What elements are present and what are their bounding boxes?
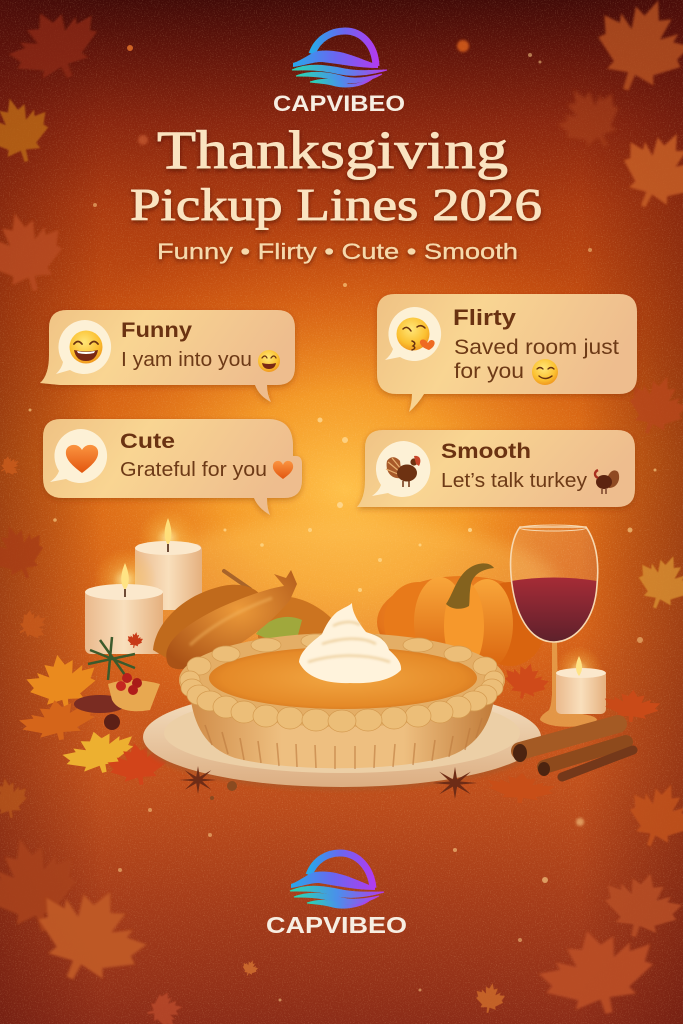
star anise and spices (179, 766, 477, 800)
bubble: cute: Cute (120, 430, 175, 453)
bubble: cute (43, 419, 302, 515)
whipped cream (299, 603, 401, 683)
bubble: flirty: Saved room just (454, 336, 619, 359)
bubble: smooth: Let’s talk turkey (441, 470, 587, 492)
icon: small smile (532, 359, 558, 385)
wine glass (511, 525, 598, 727)
bubble: smooth (357, 430, 635, 507)
icon: laughing face (56, 320, 111, 374)
leaves and branch, left of pie (17, 631, 171, 790)
bubble: funny: Funny (121, 319, 192, 342)
bubble: cute: Grateful for you (120, 459, 267, 481)
cinnamon sticks (513, 724, 633, 777)
title: Thanksgiving (157, 120, 508, 180)
top logo (292, 31, 387, 87)
foreground leaf (486, 770, 556, 806)
bubble: flirty (377, 294, 637, 412)
table setting glow (120, 520, 560, 660)
bubble: flirty: Flirty (453, 305, 517, 330)
icon: turkey (372, 441, 430, 497)
bottom logo (290, 853, 384, 908)
icon: small turkey (595, 470, 619, 494)
bubble: smooth: Smooth (441, 440, 531, 463)
pumpkin pie (179, 633, 505, 769)
pumpkin (377, 563, 547, 671)
icon: heart (50, 429, 107, 483)
crust rim (180, 634, 504, 732)
plate (143, 687, 541, 790)
candle: front (85, 548, 163, 654)
icon: small smile (258, 350, 280, 372)
subtitle: Funny • Flirty • Cute • Smooth (157, 239, 518, 264)
bubble: flirty: for you (454, 360, 524, 383)
candle: small (555, 646, 606, 714)
icon: kissing face (385, 307, 441, 361)
leaves right of plate (603, 688, 661, 724)
candle: back (135, 508, 202, 610)
top logo wordmark: CAPVIBEO (273, 91, 405, 116)
title (130, 120, 542, 230)
bubble: funny: I yam into you (121, 349, 252, 371)
roast turkey (153, 570, 335, 669)
title: Pickup Lines 2026 (130, 179, 542, 230)
bottom logo wordmark: CAPVIBEO (266, 912, 407, 938)
bubble: funny (40, 310, 295, 402)
icon: small heart (273, 461, 293, 479)
right leaf (500, 658, 552, 704)
